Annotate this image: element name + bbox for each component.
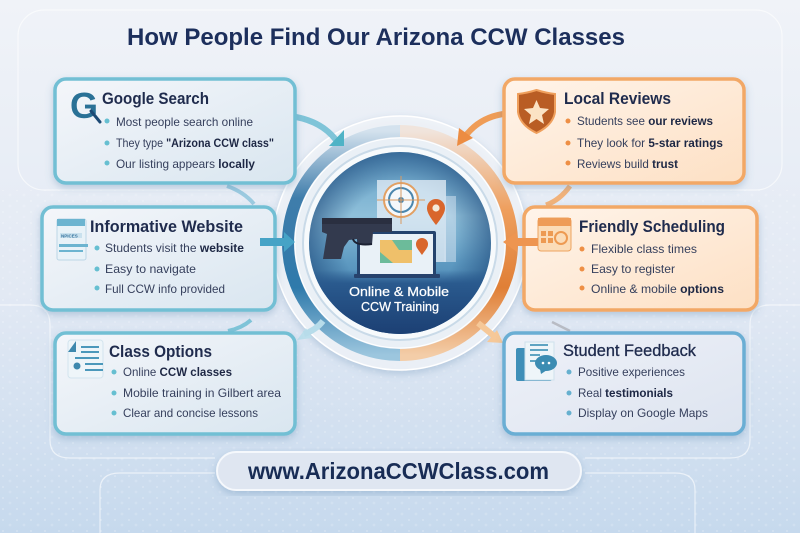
bullet list (112, 365, 281, 420)
bullet list: Easy to register (591, 262, 675, 276)
heading: Class Options (109, 343, 212, 361)
bullet list: Real testimonials (578, 386, 673, 400)
center label: CCW Training (361, 299, 439, 314)
bullet list: Online CCW classes (123, 365, 232, 379)
bullet list: Display on Google Maps (578, 406, 708, 420)
bullet list (566, 365, 708, 420)
illustration: handgun (322, 218, 392, 259)
panel: Student Feedback (504, 333, 744, 434)
heading: Friendly Scheduling (579, 218, 725, 236)
bullet list: Students see our reviews (577, 114, 713, 128)
icon: magnifier G: G (70, 85, 98, 126)
panel: Informative Website (42, 207, 275, 310)
icon: map pin (427, 199, 445, 225)
bullet list (580, 242, 724, 296)
panel: Google Search (55, 79, 295, 183)
connector arrows (227, 114, 570, 343)
bullet list: Positive experiences (578, 365, 685, 379)
bullet list: Clear and concise lessons (123, 406, 258, 420)
heading: Local Reviews (564, 90, 671, 108)
bullet list (94, 241, 244, 296)
arrow: scheduling to center (503, 232, 538, 252)
panel: Local Reviews (504, 79, 744, 183)
icon: calendar (538, 218, 571, 251)
center label (349, 284, 449, 314)
bullet list (104, 115, 274, 171)
bullet list: Online & mobile options (591, 282, 724, 296)
arrow: website to center (260, 232, 295, 252)
heading: Student Feedback (563, 342, 697, 360)
icon: feedback document (516, 342, 557, 381)
bullet list: Most people search online (116, 115, 253, 129)
bullet list: Reviews build trust (577, 157, 678, 171)
illustration: documents and target (377, 176, 456, 262)
heading: Informative Website (90, 218, 243, 236)
icon: shield star (518, 90, 555, 133)
center label: Online & Mobile (349, 284, 449, 299)
panel: Class Options (55, 333, 295, 434)
bullet list: They look for 5-star ratings (577, 136, 723, 150)
icon: web page (57, 219, 88, 260)
icon: document (68, 340, 103, 378)
website URL pill: www.ArizonaCCWClass.com (247, 458, 549, 484)
bullet list (566, 114, 723, 171)
heading: Google Search (102, 90, 209, 108)
bullet list: Mobile training in Gilbert area (123, 386, 281, 400)
bullet list: They type "Arizona CCW class" (116, 136, 274, 150)
panel: Friendly Scheduling (524, 207, 757, 310)
website URL pill (217, 452, 581, 490)
icon: web page: NPICES (61, 234, 78, 238)
bullet list: Students visit the website (105, 241, 244, 255)
bullet list: Easy to navigate (105, 262, 196, 276)
bullet list: Full CCW info provided (105, 282, 225, 296)
illustration: laptop with map (354, 231, 440, 278)
center circle (273, 116, 527, 370)
bullet list: Flexible class times (591, 242, 697, 256)
title: How People Find Our Arizona CCW Classes (127, 24, 625, 51)
bullet list: Our listing appears locally (116, 157, 255, 171)
